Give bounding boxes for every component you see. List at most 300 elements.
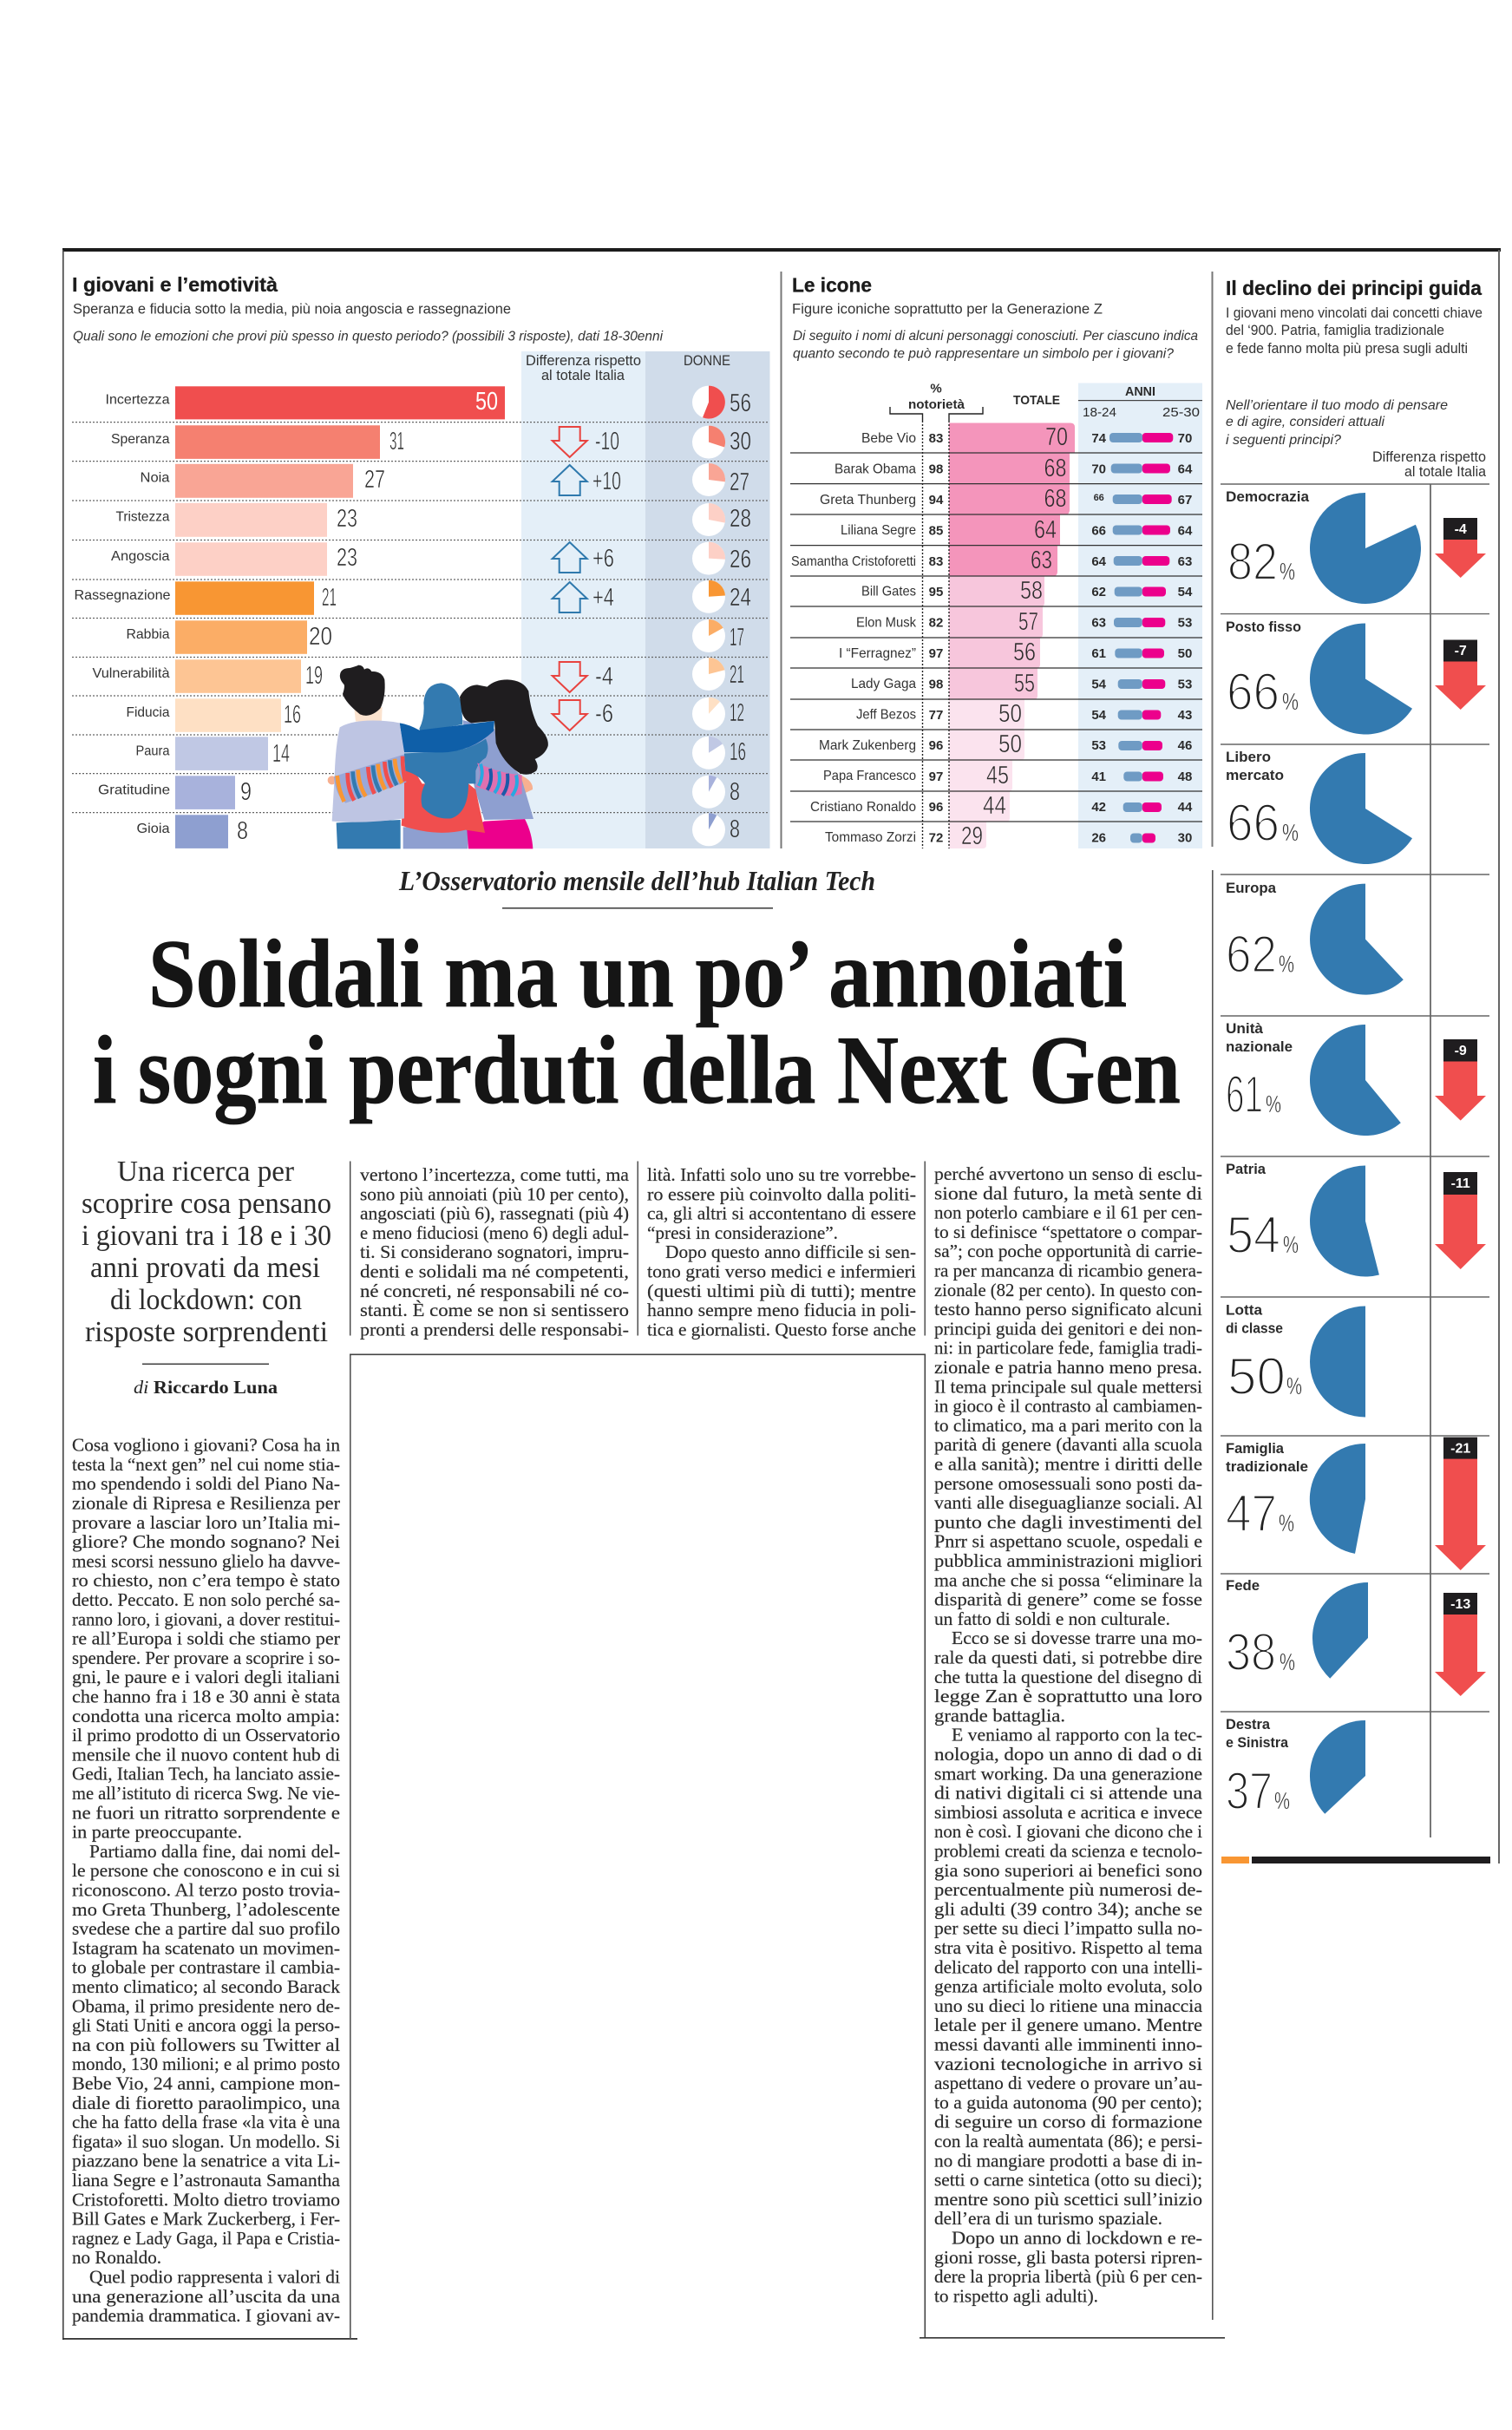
table rows: age values: 54: [1091, 677, 1107, 692]
row: Destra e Sinistra: Destra: [1226, 1716, 1271, 1732]
subtitle: I giovani meno vincolati dai concetti chiave: [1226, 305, 1483, 321]
column heading: differenza: Differenza rispetto: [526, 352, 641, 369]
row: Unità nazionale: 61: [1226, 1065, 1263, 1123]
row: Libero mercato: [1226, 749, 1412, 864]
deck: anni provati da mesi: [90, 1252, 320, 1284]
column headings: ANNI: [1125, 384, 1155, 399]
table rows: age values: 53: [1178, 616, 1192, 630]
table rows: notorietà: 72: [929, 831, 943, 845]
pie charts: donne: 8: [730, 815, 740, 843]
row: Democrazia: %: [1280, 558, 1295, 585]
table rows: names: Lady Gaga: [851, 677, 916, 691]
bar chart: emozioni: Rabbia: [127, 627, 170, 642]
table rows: age values: 26: [1091, 831, 1106, 845]
headline: [93, 920, 1181, 1124]
row: Fede: %: [1280, 1648, 1295, 1675]
article column 1: Cristoforetti. Molto dietro troviamo: [72, 2189, 340, 2210]
article column 4: vazioni tecnologiche in arrivo si: [934, 2053, 1202, 2074]
article column 4: e alla sanità); mentre i diritti delle: [934, 1454, 1202, 1475]
pie charts: donne: 28: [730, 505, 751, 533]
article column 4: problemi creati da scienza e tecnolo-: [934, 1841, 1202, 1862]
article column 2: pronti a prendersi delle responsabi-: [360, 1319, 629, 1339]
table rows: names: Samantha Cristoforetti: [791, 554, 916, 569]
row: Lotta di classe: 50: [1227, 1347, 1286, 1405]
article column 1: che hanno fra i 18 e 30 anni è stata: [72, 1687, 341, 1707]
article column 3: (questi ultimi più di tutti); mentre: [647, 1280, 916, 1301]
article column 4: di nativi digitali ci si attende una: [934, 1783, 1203, 1804]
article column 1: testa la “next gen” nel cui nome stia-: [72, 1454, 340, 1475]
article column 4: zionale e patria hanno meno presa.: [934, 1357, 1202, 1378]
row: Posto fisso: 66: [1227, 663, 1280, 721]
deck: [82, 1156, 331, 1348]
table rows: names: Jeff Bezos: [856, 708, 916, 723]
table rows: notorietà: 82: [929, 616, 943, 630]
row: Lotta di classe: %: [1286, 1372, 1302, 1399]
bar chart: emozioni: 8: [237, 817, 248, 845]
row: Lotta di classe: di classe: [1226, 1320, 1283, 1336]
table rows: age values: 43: [1178, 708, 1192, 723]
article column 4: dere la propria libertà (più 6 per cen-: [934, 2266, 1202, 2287]
article column 1: Gedi, Italian Tech, ha lanciato assie-: [72, 1764, 340, 1785]
table rows: age values: 66: [1094, 493, 1104, 503]
table rows: totale values: 68: [1044, 455, 1067, 482]
table rows: age values: 70: [1178, 431, 1192, 446]
row: Unità nazionale: %: [1266, 1091, 1281, 1117]
article column 1: detto. Peccato. E non solo perché sa-: [72, 1589, 340, 1610]
article column 1: [72, 1435, 341, 2326]
difference arrows: -4: [595, 663, 613, 691]
column heading: differenza: [1372, 449, 1486, 480]
article column 4: perché avvertono un senso di esclu-: [934, 1163, 1202, 1184]
closing bar: [1221, 1857, 1490, 1863]
article column 3: lità. Infatti solo uno su tre vorrebbe-: [647, 1164, 916, 1185]
table rows: names: Tommaso Zorzi: [825, 830, 916, 845]
row: Libero mercato: %: [1282, 819, 1299, 846]
row: Famiglia tradizionale: %: [1279, 1510, 1294, 1536]
table rows: totale values: 58: [1020, 577, 1043, 605]
article column 1: gni, le paure e i valori degli italiani: [72, 1667, 340, 1687]
article column 3: [647, 1164, 916, 1339]
article column 4: letale per il genere umano. Mentre: [934, 2014, 1202, 2035]
table rows: age values: 64: [1091, 554, 1107, 569]
bar chart: emozioni: 19: [305, 662, 323, 690]
article column 1: to globale per contrastare il cambia-: [72, 1957, 340, 1978]
table rows: age values: 63: [1091, 616, 1106, 630]
article column 1: liana Segre e l’astronauta Samantha: [72, 2170, 341, 2191]
table rows: notorietà: 98: [929, 462, 943, 477]
panel: I giovani e l'emotività: [72, 273, 770, 848]
bar chart: emozioni: Speranza: [111, 432, 170, 447]
table rows: totale values: 45: [986, 762, 1009, 789]
table rows: names: Barak Obama: [835, 462, 916, 477]
table rows: age values: 30: [1178, 831, 1192, 845]
column headings: [890, 382, 1202, 421]
bar chart: emozioni: 21: [322, 584, 337, 612]
table rows: age values: 42: [1091, 800, 1106, 815]
table rows: age values: 61: [1091, 646, 1106, 661]
difference arrows: -10: [595, 428, 619, 455]
table rows: age values: 48: [1178, 770, 1192, 784]
article column 1: mondo, 130 milioni; e al primo posto: [72, 2053, 340, 2074]
table rows: names: Cristiano Ronaldo: [810, 800, 916, 815]
column headings: %: [930, 382, 942, 396]
pie charts: donne: 26: [730, 546, 751, 573]
article column 1: il primo prodotto di un Osservatorio: [72, 1725, 340, 1746]
article column 1: svedese che a partire dal suo profilo: [72, 1918, 340, 1939]
table rows: age values: 50: [1178, 646, 1192, 661]
article column 4: principi guida dei genitori e dei non-: [934, 1318, 1202, 1339]
column heading: differenza: al totale Italia: [1404, 463, 1486, 480]
row: Unità nazionale: [1226, 1020, 1486, 1136]
table rows: notorietà: 83: [929, 431, 943, 446]
table rows: age values: 70: [1091, 462, 1106, 477]
table rows: names: Bebe Vio: [861, 431, 916, 446]
article column 4: percentualmente più numerosi de-: [934, 1879, 1202, 1900]
subtitle: e fede fanno molta più presa sugli adulti: [1226, 340, 1468, 357]
row: Lotta di classe: Lotta: [1226, 1301, 1263, 1319]
article column 1: Istagram ha scatenato un movimen-: [72, 1937, 340, 1958]
article column 4: simbiosi assoluta e acritica e invece: [934, 1802, 1202, 1823]
bar chart: emozioni: Angoscia: [111, 549, 170, 564]
table rows: age values: 44: [1178, 800, 1193, 815]
article column 2: [360, 1164, 630, 1339]
pie charts: donne: 27: [730, 468, 749, 496]
row: Democrazia: Democrazia: [1226, 488, 1310, 505]
bar chart: emozioni: Paura: [135, 744, 170, 758]
bar chart: emozioni: 23: [337, 505, 357, 533]
article column 4: to rispetto agli adulti).: [934, 2285, 1098, 2306]
pie charts: donne: 30: [730, 428, 751, 455]
pie charts: donne: [692, 386, 751, 846]
article column 4: Dopo un anno di lockdown e re-: [952, 2228, 1202, 2249]
article column 3: “presi in considerazione”.: [647, 1222, 838, 1243]
article column 4: Pnrr si aspettano scuole, ospedali e: [934, 1531, 1202, 1552]
article column 4: parità di genere (davanti alla scuola: [934, 1434, 1203, 1455]
column headings: TOTALE: [1013, 393, 1060, 408]
headline: Solidali ma un po’ annoiati: [148, 920, 1127, 1028]
table rows: notorietà: 85: [929, 524, 943, 538]
bar chart: emozioni: Incertezza: [106, 392, 170, 408]
article column 1: Obama, il primo presidente nero de-: [72, 1995, 340, 2016]
subtitle: del ‘900. Patria, famiglia tradizionale: [1226, 322, 1444, 338]
heading: Le icone: [792, 274, 872, 297]
article column 1: figata» il suo slogan. Un modello. Si: [72, 2131, 340, 2152]
article column 1: re all’Europa i soldi che stiamo per: [72, 1628, 340, 1649]
article column 2: vertono l’incertezza, come tutti, ma: [360, 1164, 630, 1185]
article column 4: ra per mancanza di ricambio genera-: [934, 1260, 1202, 1280]
pie charts: donne: 24: [730, 584, 751, 612]
row: Destra e Sinistra: e Sinistra: [1226, 1734, 1289, 1751]
deck: scoprire cosa pensano: [82, 1188, 331, 1220]
row: Fede: Fede: [1226, 1577, 1260, 1594]
table rows: names: Papa Francesco: [823, 769, 916, 783]
table rows: notorietà: 97: [929, 770, 943, 784]
article column 4: no di mangiare prodotti a base di in-: [934, 2150, 1202, 2171]
headline: i sogni perduti della Next Gen: [93, 1017, 1181, 1124]
row: Famiglia tradizionale: tradizionale: [1226, 1458, 1308, 1475]
article column 4: setti o carne sintetica (otto su dieci);: [934, 2170, 1202, 2191]
row: Fede: -13: [1450, 1597, 1470, 1612]
article column 2: e meno fiduciosi (meno 6) degli adul-: [360, 1222, 629, 1243]
row: Posto fisso: %: [1282, 688, 1299, 715]
article column 4: con la realtà aumentata (86); e persi-: [934, 2131, 1202, 2152]
article column 4: di seguire un corso di formazione: [934, 2112, 1202, 2132]
row: Democrazia: [1226, 488, 1486, 604]
column background: differenza: [521, 351, 645, 848]
row: Democrazia: -4: [1455, 522, 1467, 537]
difference arrows: -6: [595, 700, 613, 728]
row: Posto fisso: Posto fisso: [1226, 619, 1301, 635]
article column 4: vanti alle diseguaglianze sociali. Al: [934, 1492, 1202, 1513]
table rows: totale values: 50: [998, 700, 1022, 728]
article column 3: Dopo questo anno difficile si sen-: [665, 1241, 916, 1262]
table rows: notorietà: [929, 431, 944, 845]
article column 1: riconoscono. Al terzo posto trovia-: [72, 1879, 340, 1900]
article column 1: mento climatico; al secondo Barack: [72, 1976, 341, 1997]
bar chart: emozioni: Gratitudine: [98, 783, 170, 798]
article column 1: Partiamo dalla fine, dai nomi del-: [89, 1841, 340, 1862]
article column 3: ro essere più coinvolto dalla politi-: [647, 1183, 916, 1204]
article column 4: che tutta la questione del disegno di: [934, 1667, 1202, 1687]
article column 4: un fatto di soldi e non culturale.: [934, 1608, 1170, 1629]
column heading: differenza: Differenza rispetto: [1372, 449, 1486, 465]
article column 1: ne fuori un ritratto sorprendente e: [72, 1802, 340, 1823]
article column 4: disparità di genere” come se fosse: [934, 1589, 1202, 1610]
table rows: notorietà: 97: [929, 646, 943, 661]
row: Patria: 54: [1227, 1206, 1280, 1264]
article column 4: non è così. I giovani che dicono che i: [934, 1821, 1202, 1842]
column heading: differenza: al totale Italia: [541, 367, 625, 383]
article column 4: sa”; con poche opportunità di carrie-: [934, 1241, 1202, 1261]
article column 3: hanno sempre meno fiducia in poli-: [647, 1300, 916, 1320]
row: Posto fisso: [1226, 619, 1486, 734]
row: Patria: Patria: [1226, 1161, 1267, 1177]
article column 4: smart working. Da una generazione: [934, 1763, 1202, 1784]
bar chart: emozioni: 27: [364, 466, 385, 494]
article column 1: no Ronaldo.: [72, 2247, 161, 2268]
article column 4: uno su dieci lo ritiene una minaccia: [934, 1995, 1203, 2016]
table rows: names: Liliana Segre: [841, 523, 916, 538]
row: Libero mercato: mercato: [1226, 767, 1284, 783]
article column 1: na con più followers su Twitter al: [72, 2034, 340, 2055]
article column 2: ti. Si considerano sognatori, impru-: [360, 1241, 629, 1262]
column heading: differenza: [526, 352, 641, 383]
table rows: names: Bill Gates: [861, 585, 916, 599]
table rows: notorietà: 96: [929, 738, 943, 753]
article column 4: gioni rosse, gli basta potersi ripren-: [934, 2247, 1202, 2268]
age bars: [1109, 433, 1173, 843]
difference arrows: +10: [592, 468, 621, 495]
bar chart: emozioni: 16: [284, 701, 301, 729]
subtitle: [1226, 305, 1483, 357]
article column 4: testo hanno perso significato alcuni: [934, 1299, 1202, 1320]
article column 2: stanti. È come se non si sentissero: [360, 1300, 629, 1320]
table rows: age values: 54: [1091, 708, 1107, 723]
table rows: age values: 74: [1091, 431, 1107, 446]
article column 1: in parte preoccupante.: [72, 1822, 242, 1843]
table rows: notorietà: 95: [929, 585, 943, 599]
article column 1: mesi scorsi nessuno glielo ha davve-: [72, 1550, 340, 1571]
article column 4: to climatico, ma a pari merito con la: [934, 1415, 1203, 1436]
bar chart: emozioni: 31: [389, 428, 404, 455]
pie charts: donne: 16: [730, 738, 746, 766]
table rows: age values: 66: [1091, 524, 1106, 538]
article column 1: Bebe Vio, 24 anni, campione mon-: [72, 2073, 340, 2094]
article column 1: le persone che conoscono e in cui si: [72, 1860, 340, 1881]
article column 4: to si definisce “spettatore o compar-: [934, 1222, 1202, 1242]
article column 4: grande battaglia.: [934, 1705, 1065, 1726]
row: Posto fisso: -7: [1455, 644, 1467, 658]
column background: donne: [645, 351, 770, 848]
article column 4: punto che dagli investimenti del: [934, 1511, 1202, 1532]
table rows: notorietà: 83: [929, 554, 943, 569]
article column 4: zionale (82 per cento). In questo con-: [934, 1280, 1202, 1300]
table rows: totale values: 56: [1013, 639, 1036, 666]
table rows: notorietà: 96: [929, 800, 943, 815]
table rows: age values: 63: [1178, 554, 1192, 569]
article column 1: Cosa vogliono i giovani? Cosa ha in: [72, 1435, 340, 1456]
article column 2: sono più annoiati (più 10 per cento),: [360, 1183, 629, 1204]
question: quanto secondo te può rappresentare un simbolo per i giovani?: [793, 347, 1174, 361]
article column 4: delicato del rapporto con una intelli-: [934, 1956, 1202, 1977]
article column 1: mensile che il nuovo content hub di: [72, 1744, 340, 1765]
column headings: 18-24: [1083, 405, 1116, 420]
table rows: names: [791, 431, 917, 845]
subtitle: Figure iconiche soprattutto per la Generazione Z: [792, 301, 1103, 318]
row: Famiglia tradizionale: [1226, 1438, 1486, 1570]
bar chart: emozioni: Gioia: [137, 822, 170, 836]
row: Famiglia tradizionale: -21: [1450, 1442, 1470, 1456]
article column 1: ragnez e Lady Gaga, il Papa e Cristia-: [72, 2228, 340, 2249]
bar chart: emozioni: Rassegnazione: [75, 588, 171, 603]
row: Destra e Sinistra: 37: [1226, 1762, 1273, 1820]
article column 4: to a guida autonoma (90 per cento);: [934, 2092, 1202, 2112]
bar chart: emozioni: 50: [475, 388, 498, 416]
article column 1: condotta una ricerca molto ampia:: [72, 1706, 340, 1726]
row: Lotta di classe: [1226, 1301, 1365, 1418]
article column 4: ma anche che si possa “eliminare la: [934, 1569, 1203, 1590]
panel: Le icone: [781, 272, 1213, 850]
row: Patria: %: [1283, 1231, 1299, 1258]
table rows: notorietà: 98: [929, 677, 943, 692]
row: Destra e Sinistra: [1226, 1716, 1365, 1820]
table rows: age values: 53: [1178, 677, 1192, 692]
pie charts: donne: 8: [730, 778, 740, 806]
byline: di Riccardo Luna: [134, 1377, 278, 1398]
pie charts: donne: 21: [730, 661, 744, 689]
article column 1: mo Greta Thunberg, l’adolescente: [72, 1899, 340, 1920]
article column 1: una generazione all’uscita da una: [72, 2286, 341, 2307]
article column 1: diale di fioretto paraolimpico, una: [72, 2093, 341, 2113]
row: Unità nazionale: -9: [1455, 1044, 1467, 1058]
article column 4: mentre sono più scettici sull’inizio: [934, 2189, 1202, 2210]
table rows: totale values: 70: [1045, 423, 1068, 451]
table rows: age values: 54: [1178, 585, 1193, 599]
article column 1: ranno loro, i giovani, a dover restitui-: [72, 1608, 340, 1629]
table rows: totale values: 64: [1034, 516, 1057, 544]
difference arrows: +4: [592, 584, 614, 612]
article column 4: rale da questi dati, si potrebbe dire: [934, 1647, 1202, 1667]
article column 3: tono grati verso medici e infermieri: [647, 1261, 916, 1282]
row: Famiglia tradizionale: 47: [1226, 1484, 1277, 1542]
bar chart: emozioni: [75, 386, 505, 848]
table rows: names: Elon Musk: [856, 615, 917, 630]
bar chart: emozioni: Tristezza: [116, 510, 170, 524]
heading: I giovani e l’emotività: [72, 273, 278, 296]
deck: di lockdown: con: [110, 1284, 302, 1316]
table rows: totale values: 63: [1031, 547, 1052, 574]
question: Nell’orientare il tuo modo di pensare: [1226, 398, 1448, 413]
article column 4: dell’era di un turismo spaziale.: [934, 2208, 1162, 2229]
article column 4: gia sono superiori ai benefici sono: [934, 1860, 1202, 1881]
question: [1226, 398, 1448, 448]
table rows: totale values: 68: [1044, 485, 1067, 513]
article column 2: né concreti, né responsabili né co-: [360, 1280, 629, 1301]
row: Fede: [1226, 1577, 1486, 1696]
question: Di seguito i nomi di alcuni personaggi conosciuti. Per ciascuno indica: [793, 329, 1198, 344]
article column 3: ca, gli altri si accontentano di essere: [647, 1203, 916, 1224]
question: Quali sono le emozioni che provi più spesso in questo periodo? (possibili 3 risposte), dati 18-30enni: [73, 330, 663, 344]
table rows: totale values: 50: [998, 730, 1022, 758]
table rows: names: Mark Zukenberg: [819, 738, 916, 753]
article column 1: pandemia drammatica. I giovani av-: [72, 2305, 340, 2326]
article column 1: zionale di Ripresa e Resilienza per: [72, 1492, 340, 1513]
article column 1: provare a lasciar loro un’Italia mi-: [72, 1512, 340, 1533]
table rows: totale values: [961, 423, 1068, 850]
article column 4: Il tema principale sul quale mettersi: [934, 1376, 1202, 1397]
deck: risposte sorprendenti: [85, 1316, 328, 1348]
table rows: notorietà: 77: [929, 708, 943, 723]
deck: Una ricerca per: [117, 1156, 295, 1188]
row: Patria: [1226, 1161, 1486, 1277]
table rows: age values: 64: [1178, 462, 1193, 477]
question: e di agire, consideri attuali: [1226, 415, 1384, 429]
pie charts: donne: 56: [730, 390, 751, 417]
article column 4: genza artificiale molto evoluta, solo: [934, 1976, 1202, 1997]
row: Europa: %: [1279, 951, 1294, 977]
article column 1: piazzano bene la senatrice a vita Li-: [72, 2151, 340, 2171]
difference arrows: [553, 427, 621, 730]
article column 4: aspettano di vedere o provare un’au-: [934, 2073, 1202, 2093]
row: Democrazia: 82: [1227, 533, 1278, 591]
pie charts: donne: 12: [730, 699, 744, 727]
article column 4: in gioco è il contrasto al cambiamen-: [934, 1396, 1202, 1417]
column headings: 25-30: [1162, 405, 1200, 420]
article column 4: Ecco se si dovesse trarre una mo-: [952, 1628, 1202, 1648]
article column 2: denti e solidali ma né competenti,: [360, 1261, 629, 1282]
article column 4: messi davanti alle imminenti inno-: [934, 2034, 1202, 2054]
article column 1: Quel podio rappresenta i valori di: [89, 2266, 340, 2287]
article column 1: gliore? Che mondo sognano? Nei: [72, 1531, 340, 1552]
article column 1: spendere. Per provare a scoprire i so-: [72, 1647, 340, 1668]
row: Destra e Sinistra: %: [1274, 1787, 1290, 1814]
table rows: notorietà: 94: [929, 493, 944, 508]
bar chart: emozioni: 20: [309, 623, 332, 651]
bar chart: emozioni: Fiducia: [127, 705, 170, 720]
article column 3: tica e giornalisti. Questo forse anche: [647, 1319, 916, 1339]
article column 4: [934, 1163, 1203, 2306]
table rows: age values: 67: [1178, 493, 1192, 508]
column headings: notorietà: [908, 397, 965, 412]
bar chart: emozioni: 9: [240, 778, 252, 806]
article column 4: stra vita è positivo. Rispetto al tema: [934, 1937, 1203, 1958]
article column 4: sione dal futuro, la metà sente di: [934, 1182, 1202, 1203]
deck: i giovani tra i 18 e i 30: [82, 1220, 331, 1252]
article column 4: persone omosessuali sono posti da-: [934, 1473, 1202, 1494]
column background: anni: [1078, 383, 1202, 848]
table rows: age values: [1091, 431, 1193, 845]
column heading: donne: DONNE: [684, 352, 730, 369]
